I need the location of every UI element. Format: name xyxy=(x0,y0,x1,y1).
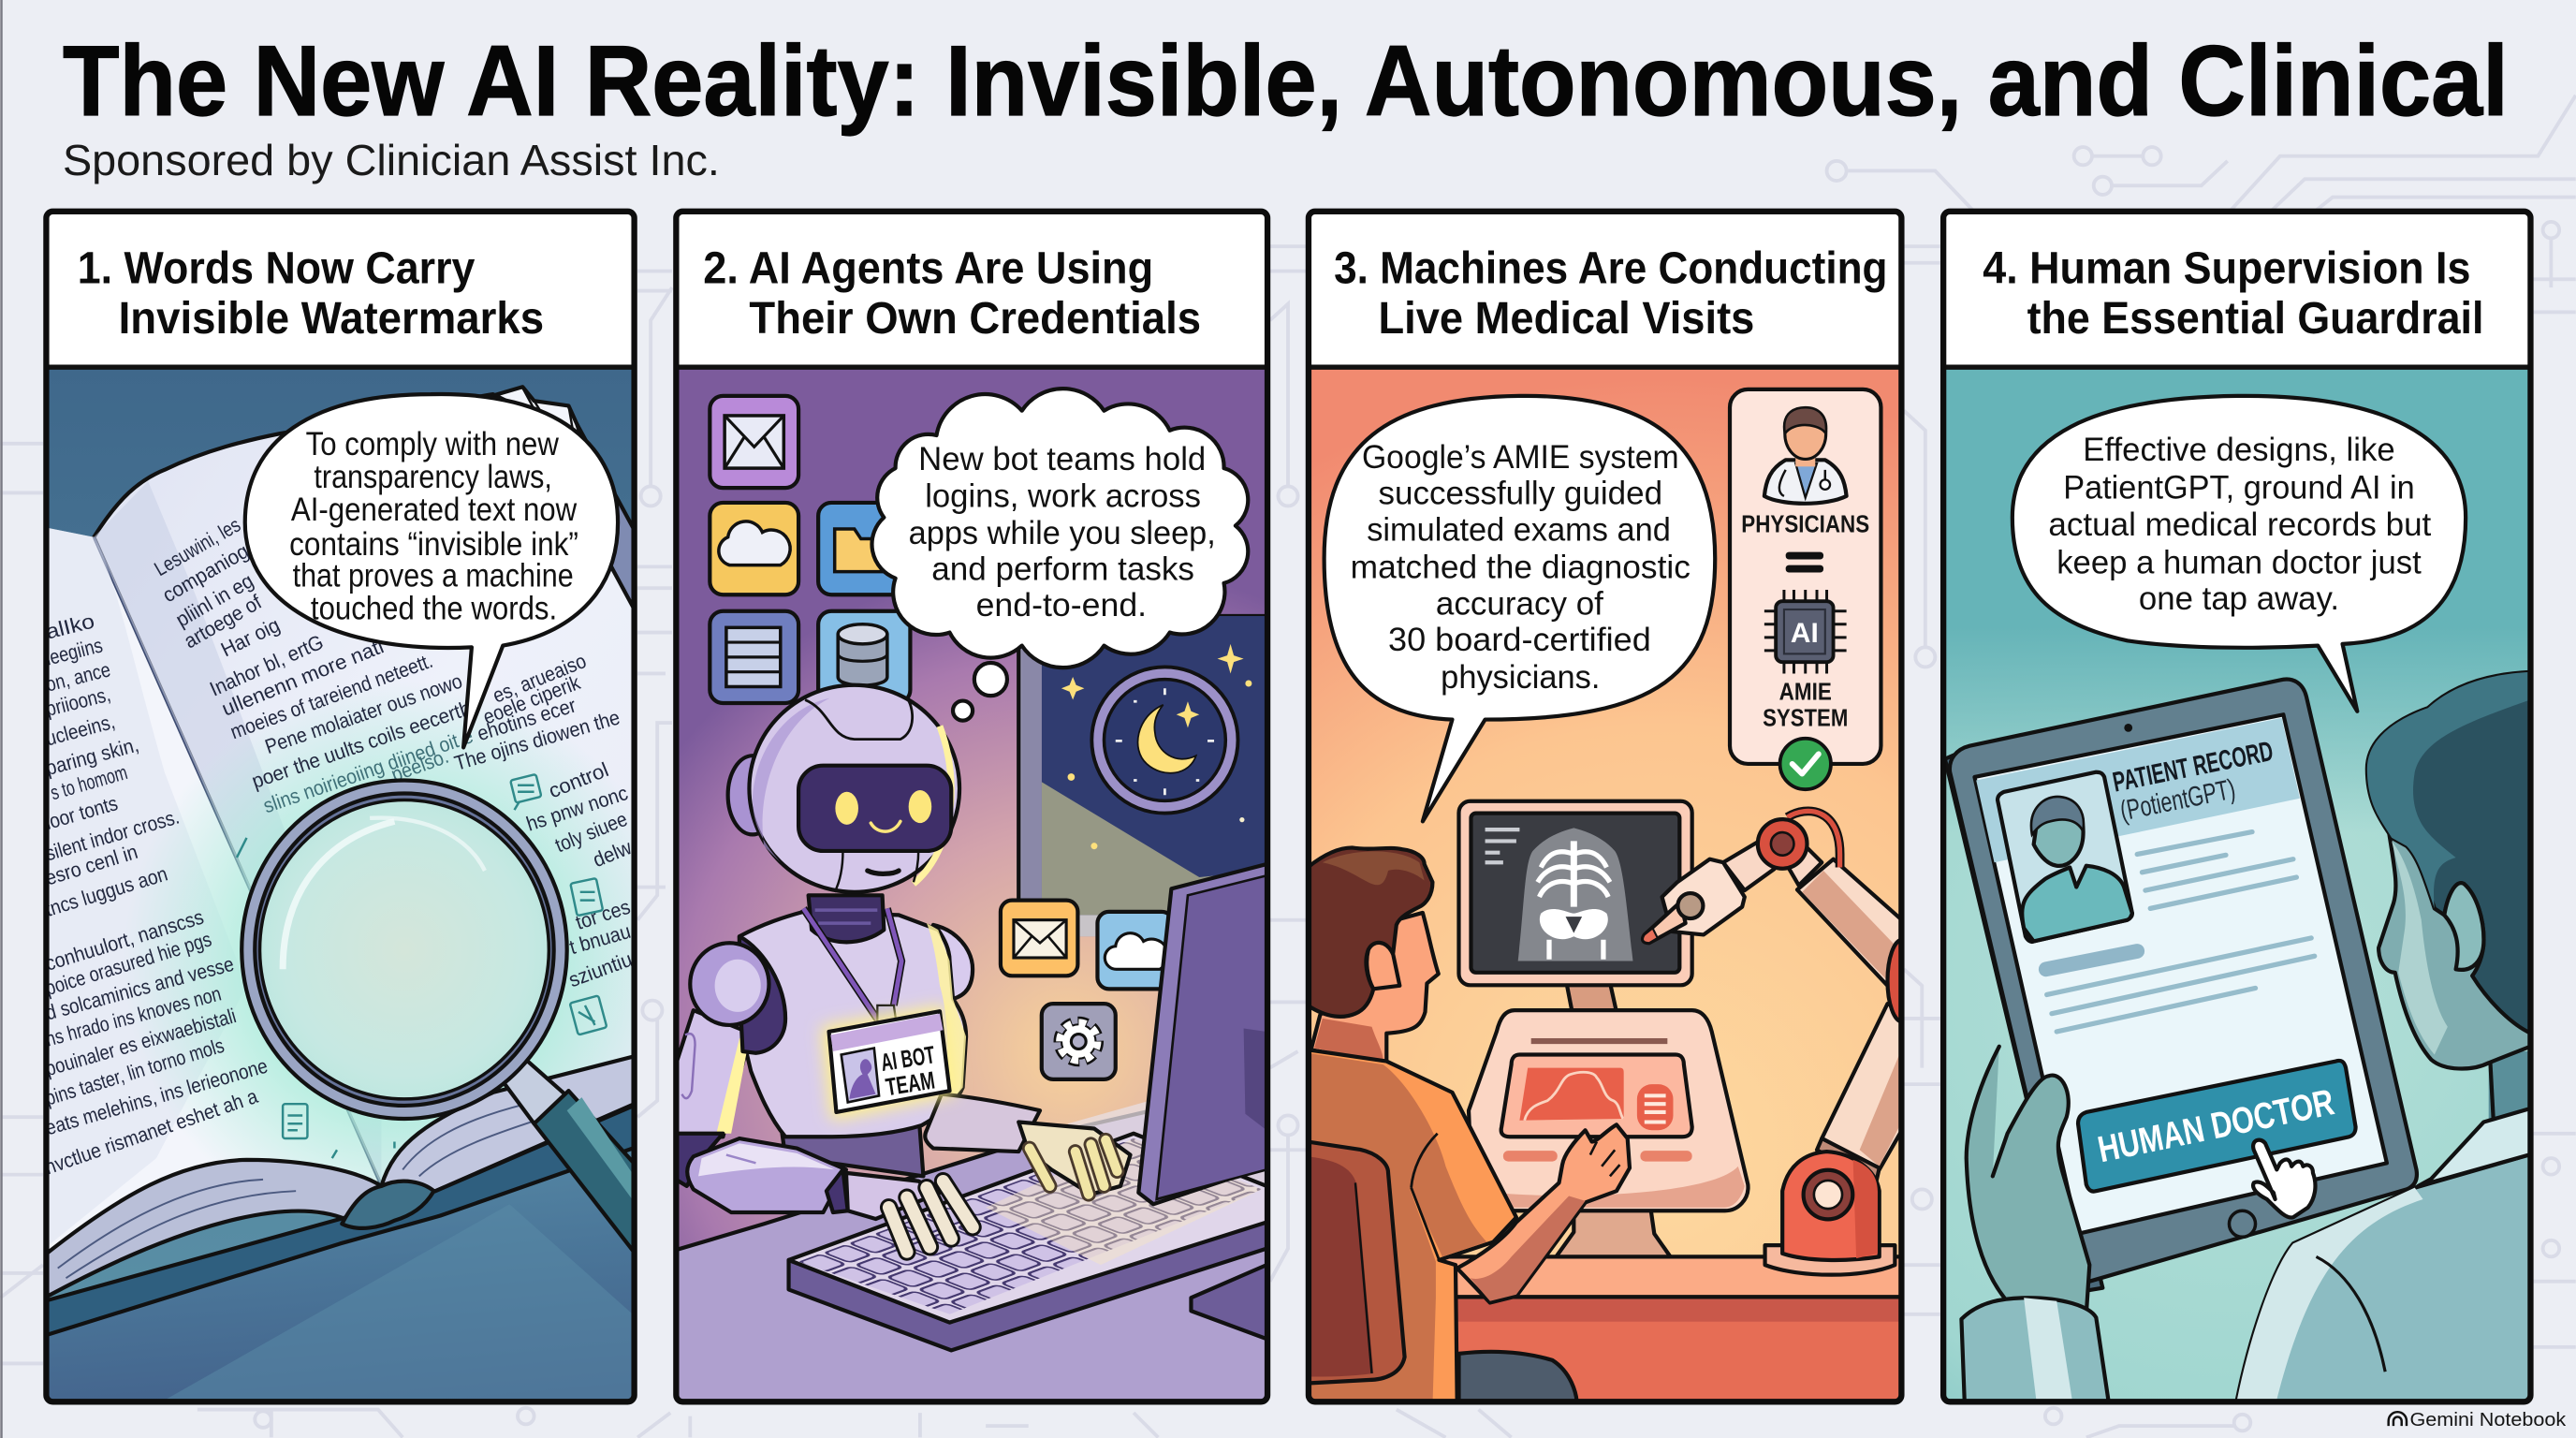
head xyxy=(728,756,777,834)
left page gibberish text: nvctlue rismanet eshet ah a xyxy=(42,1084,261,1179)
patient record label: PATIENT RECORD xyxy=(2110,736,2276,799)
elbow and left forearm xyxy=(670,1134,723,1186)
neck and face xyxy=(1311,913,1439,1064)
header 3: 3. Machines Are Conducting xyxy=(1334,243,1887,294)
left upper arm xyxy=(680,1008,746,1139)
right page gibberish text: hs pnw nonc xyxy=(523,781,631,836)
callout: speech bubble: 30 board-certified xyxy=(1388,622,1651,658)
right page gibberish text: Inahor bl, ertG xyxy=(206,630,327,701)
right page gibberish text: companiog xyxy=(158,539,253,607)
left page gibberish text: on, ance xyxy=(43,657,112,697)
badge glow xyxy=(822,1005,957,1121)
app icon tiles xyxy=(710,396,910,703)
left page gibberish text: esro cenl in xyxy=(42,840,140,890)
spine xyxy=(342,1181,434,1228)
magnifying glass xyxy=(242,780,644,1265)
left page gibberish text: ucleeins, xyxy=(43,710,117,750)
icon: pointing hand xyxy=(2253,1140,2315,1218)
callout: speech bubble: simulated exams and xyxy=(1367,511,1671,548)
patient record photo xyxy=(1998,772,2132,942)
window at night xyxy=(1018,616,1273,936)
left page gibberish text: conhuulort, nanscss xyxy=(42,905,206,976)
illustration: patient and robot xyxy=(1298,368,1917,1406)
x-ray monitor xyxy=(1458,801,1692,1012)
right wrist and palm xyxy=(1018,1122,1131,1195)
desk xyxy=(1298,1256,1909,1406)
left page gibberish text: leegiins xyxy=(43,633,105,670)
callout: thought cloud: logins, work across xyxy=(925,477,1201,514)
monitor xyxy=(1138,864,1266,1204)
left page gibberish text: s to homom xyxy=(48,760,130,804)
callout: speech bubble: transparency laws, xyxy=(314,459,552,495)
hand xyxy=(1662,859,1745,934)
left page gibberish text: poice orasured hie pgs xyxy=(42,927,214,1000)
left page gibberish text: pins taster, lin torno mols xyxy=(42,1034,227,1110)
header 1: 1. Words Now Carry xyxy=(78,243,476,294)
right page gibberish text: Har oig xyxy=(217,613,284,661)
id badge: AI BOT TEAM: AI BOT xyxy=(879,1040,937,1077)
right page gibberish text xyxy=(151,513,636,991)
card: physicians equal AMIE system xyxy=(1730,389,1881,789)
upper arm xyxy=(1797,859,1906,994)
patient xyxy=(1308,847,1630,1406)
callout: speech bubble: successfully guided xyxy=(1379,476,1662,512)
callout: speech bubble: contains “invisible ink” xyxy=(289,526,578,563)
icon: AI chip xyxy=(1764,590,1847,673)
id badge: AI BOT TEAM: TEAM xyxy=(884,1065,937,1101)
header 3: Live Medical Visits xyxy=(1379,293,1754,344)
header 1: Invisible Watermarks xyxy=(119,293,544,344)
header 2: Their Own Credentials xyxy=(749,293,1201,344)
torso xyxy=(739,912,966,1137)
callout: thought cloud: apps while you sleep, xyxy=(909,515,1216,551)
callout: speech bubble xyxy=(1325,396,1715,821)
left page gibberish text: pouinaler es eixwaebistali xyxy=(43,1004,239,1080)
ear xyxy=(1367,943,1399,989)
illustration: robot at keyboard xyxy=(670,368,1273,1404)
right page gibberish text: eoele ciperik xyxy=(480,670,583,729)
left page gibberish text xyxy=(42,609,271,1179)
chair xyxy=(1308,1142,1405,1383)
doctor left hand xyxy=(1961,1047,2109,1406)
left page gibberish text: loor tonts xyxy=(43,791,120,834)
callout: speech bubble: physicians. xyxy=(1441,659,1600,696)
lower arm xyxy=(1822,1004,1906,1169)
right page gibberish text: control xyxy=(545,757,612,802)
left page gibberish text: hs hrado ins knoves non xyxy=(43,981,224,1051)
callout: speech bubble: accuracy of xyxy=(1436,585,1603,622)
header 1 xyxy=(46,212,635,1401)
teal watermark icons xyxy=(237,774,607,1158)
callout: thought cloud: end-to-end. xyxy=(976,587,1147,624)
right page gibberish text: es, arueaiso xyxy=(490,649,590,708)
right page gibberish text: moeies of tareiend neteett. xyxy=(227,649,436,743)
right page gibberish text: sziuntiu xyxy=(565,947,636,991)
left page gibberish text: eats melehins, ins lerieonone xyxy=(43,1054,271,1139)
button: human doctor xyxy=(2078,1061,2356,1192)
robot hands xyxy=(827,1122,1131,1252)
left page gibberish text: priioons, xyxy=(43,682,112,721)
right page gibberish text: artoege of xyxy=(180,590,266,653)
right page stack xyxy=(381,1056,635,1191)
right page gibberish text: Pene molaiater ous nowo xyxy=(262,669,465,758)
patient record label xyxy=(2110,736,2276,827)
left page gibberish text: tncs luggus aon xyxy=(42,862,170,921)
arm and hand xyxy=(1457,1124,1630,1302)
header 4: the Essential Guardrail xyxy=(2027,293,2483,344)
tablet xyxy=(1945,680,2417,1293)
header 2 xyxy=(675,212,1267,1401)
kiosk xyxy=(1469,1010,1748,1258)
desk and keyboard xyxy=(676,1101,1265,1401)
right page gibberish text: ullenenn more nati xyxy=(218,634,387,721)
right page gibberish text: slins noirieoiing diined oit e xyxy=(260,724,476,817)
doctor head xyxy=(2367,672,2535,1134)
right page gibberish text: t bnuau xyxy=(566,919,633,959)
shoulder strap xyxy=(739,936,785,1053)
right page gibberish text: pliinl in eg xyxy=(171,568,257,632)
card: physicians equal AMIE system: AMIE xyxy=(1779,678,1832,706)
right page gibberish text: delw xyxy=(590,835,635,872)
shirt xyxy=(1308,1049,1516,1406)
right page gibberish text: The ojins diowen the xyxy=(452,705,622,775)
left page stack xyxy=(45,1160,381,1298)
callout: speech bubble: To comply with new xyxy=(306,426,559,462)
callout: speech bubble: Google’s AMIE system xyxy=(1362,439,1679,476)
callout: speech bubble xyxy=(245,394,618,747)
panel 4: human supervision xyxy=(1943,212,2538,1406)
lanyard xyxy=(803,908,901,1021)
callout: thought cloud: New bot teams hold xyxy=(918,441,1206,477)
callout: speech bubble: actual medical records but xyxy=(2048,506,2432,543)
waist xyxy=(780,1127,926,1178)
illustration: doctor with tablet xyxy=(1943,368,2538,1406)
left page gibberish text: alIko xyxy=(43,609,96,643)
watermark: Gemini Notebook: Gemini Notebook xyxy=(2409,1410,2567,1431)
id badge: AI BOT TEAM xyxy=(829,1011,950,1112)
callout: speech bubble: one tap away. xyxy=(2139,580,2339,617)
right page gibberish text: ehotins ecer xyxy=(475,693,578,745)
doctor coat xyxy=(2235,1108,2538,1406)
callout: speech bubble: that proves a machine xyxy=(293,557,574,594)
left page gibberish text: paring skin, xyxy=(43,733,141,780)
right page gibberish text: tor ces xyxy=(573,895,633,934)
left wrist and palm xyxy=(827,1169,848,1212)
header 2: 2. AI Agents Are Using xyxy=(703,243,1153,294)
card: physicians equal AMIE system: PHYSICIANS xyxy=(1741,510,1869,538)
illustration: book and magnifier xyxy=(42,368,644,1413)
thought bubble dots xyxy=(953,663,1007,721)
patient record label: (PotientGPT) xyxy=(2117,773,2238,827)
panel 3: live visits xyxy=(1298,212,1917,1406)
floating icons xyxy=(1001,901,1173,1079)
callout: speech bubble: keep a human doctor just xyxy=(2056,544,2422,580)
icon: physician xyxy=(1764,407,1847,504)
base xyxy=(1817,1138,1880,1182)
icon: check badge xyxy=(1780,739,1831,789)
hair xyxy=(1308,847,1432,1017)
panel 1: watermarks xyxy=(42,212,644,1413)
subtitle: Sponsored by Clinician Assist Inc. xyxy=(63,136,720,184)
icon: equals xyxy=(1786,552,1823,573)
callout: speech bubble: Effective designs, like xyxy=(2083,432,2395,468)
right page gibberish text: poer the uults coils eecertb xyxy=(249,696,474,793)
book cover xyxy=(45,1104,637,1339)
callout: thought cloud xyxy=(871,389,1248,668)
right page gibberish text: toly siuee xyxy=(551,807,631,857)
callout: speech bubble: touched the words. xyxy=(311,591,557,627)
left page gibberish text: d solcaminics and vesse xyxy=(43,952,236,1025)
right page gibberish text: peelso. xyxy=(388,744,451,786)
header 4: 4. Human Supervision Is xyxy=(1983,243,2470,294)
header 4 xyxy=(1943,212,2530,1401)
panel 2: agents xyxy=(670,212,1273,1404)
button: human doctor: HUMAN DOCTOR xyxy=(2094,1081,2337,1170)
robot arm xyxy=(1643,811,1917,1275)
header 3 xyxy=(1308,212,1901,1401)
callout: speech bubble: AI-generated text now xyxy=(291,492,578,528)
icon: AI chip: AI xyxy=(1791,618,1819,649)
right page gibberish text: Lesuwini, les xyxy=(151,513,244,580)
callout: speech bubble: matched the diagnostic xyxy=(1351,550,1690,586)
card: physicians equal AMIE system: SYSTEM xyxy=(1763,704,1848,732)
callout: thought cloud: and perform tasks xyxy=(931,550,1194,587)
robot xyxy=(670,685,1040,1212)
neck xyxy=(809,895,884,942)
trousers xyxy=(1458,1352,1577,1406)
callout: speech bubble: PatientGPT, ground AI in xyxy=(2063,470,2415,506)
callout: speech bubble xyxy=(2012,396,2466,712)
forearm segment xyxy=(1723,842,1774,890)
right shoulder xyxy=(933,925,973,999)
left page gibberish text: silent indor cross. xyxy=(43,805,182,865)
right forearm xyxy=(925,1094,1040,1152)
